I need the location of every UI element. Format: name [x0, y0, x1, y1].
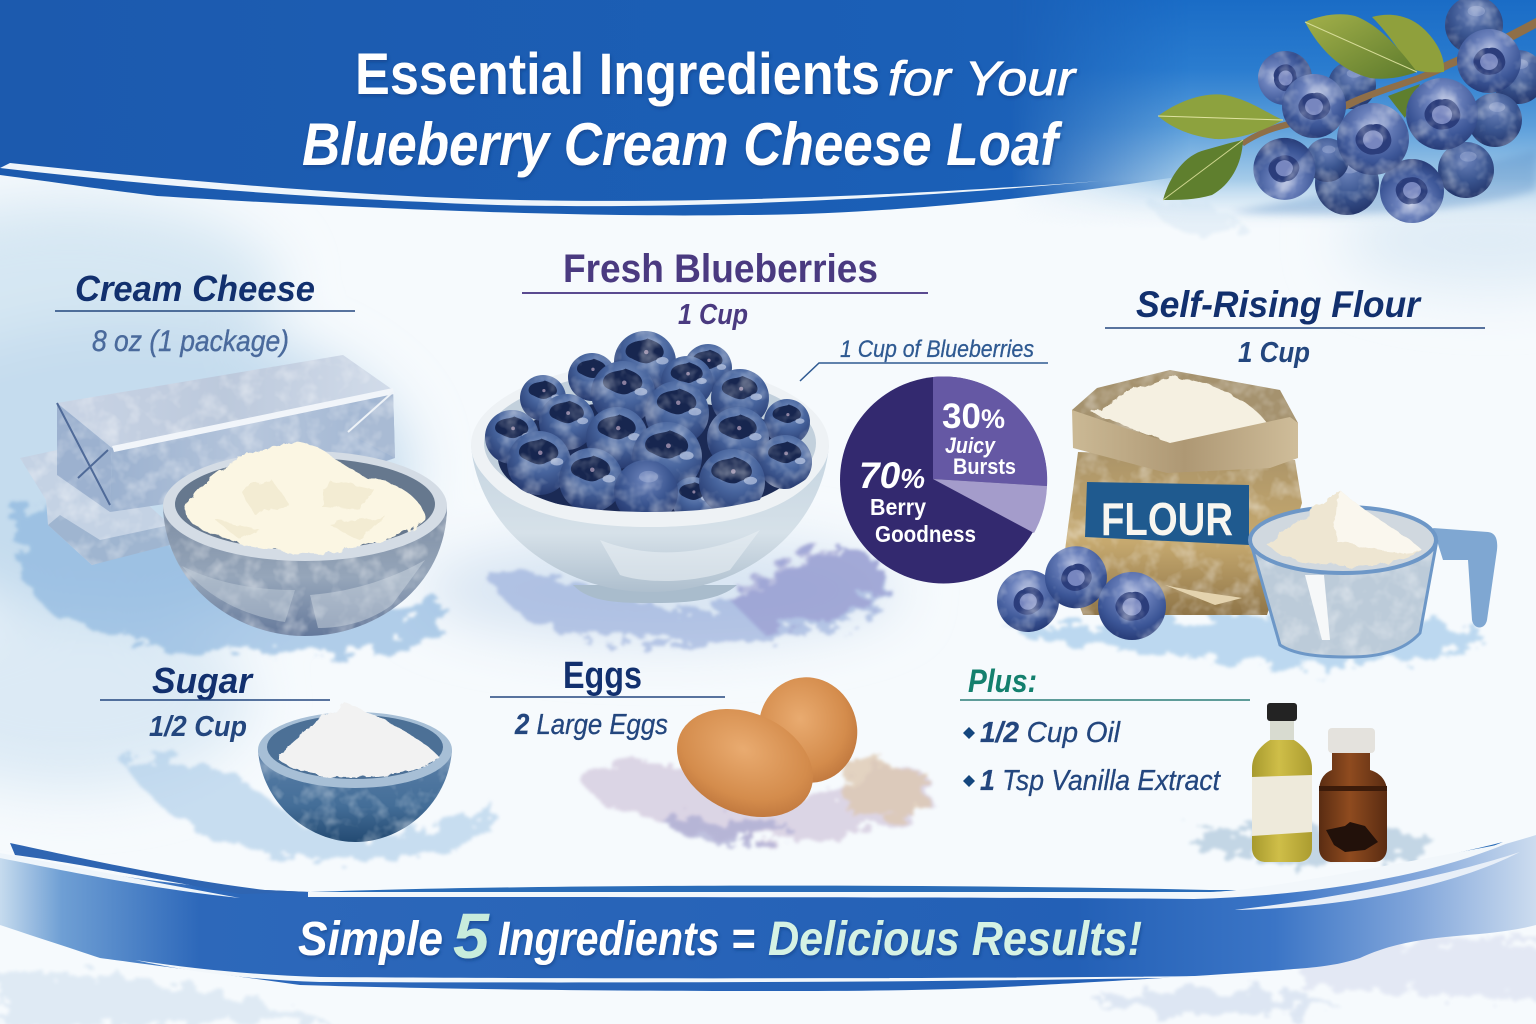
- footer tagline: [298, 900, 1142, 972]
- footer tagline: Delicious Results!: [768, 913, 1142, 966]
- text block: plus items: 1/2 Cup Oil: [980, 717, 1121, 749]
- heading: self-rising flour: [1105, 284, 1485, 369]
- pie chart: blueberry composition: Berry: [870, 494, 926, 520]
- heading: eggs: [490, 655, 725, 741]
- top banner: [0, 0, 1536, 230]
- heading: self-rising flour: 1 Cup: [1238, 337, 1310, 369]
- heading: fresh blueberries: Fresh Blueberries: [563, 247, 878, 291]
- illustration: flour sack, measuring cup, blueberries: [987, 370, 1497, 657]
- pie chart: blueberry composition: 30%: [942, 397, 1005, 436]
- text block: plus items: 1 Tsp Vanilla Extract: [980, 765, 1222, 797]
- pie chart: blueberry composition: Bursts: [953, 454, 1016, 479]
- heading: eggs: Eggs: [563, 655, 642, 697]
- heading: fresh blueberries: 1 Cup: [678, 299, 748, 331]
- illustration: blueberry branch with leaves: [1158, 0, 1536, 223]
- heading: sugar: [100, 660, 330, 743]
- text block: plus items: Plus:: [968, 663, 1037, 699]
- illustration: cream cheese package and bowl: [20, 355, 447, 636]
- title: Essential Ingredients: [355, 42, 880, 107]
- illustration: oil and vanilla bottles: [1252, 703, 1387, 862]
- heading: cream cheese: Cream Cheese: [75, 268, 315, 309]
- heading: cream cheese: [55, 268, 355, 358]
- footer tagline: Simple: [298, 913, 443, 966]
- title: Blueberry Cream Cheese Loaf: [302, 111, 1062, 178]
- heading: self-rising flour: Self-Rising Flour: [1136, 284, 1422, 325]
- title: [302, 42, 1077, 178]
- heading: sugar: 1/2 Cup: [149, 711, 247, 743]
- callout: 1 cup of blueberries: [800, 336, 1048, 381]
- callout: 1 cup of blueberries: 1 Cup of Blueberries: [840, 336, 1034, 363]
- illustration: bowl of sugar: [258, 703, 452, 842]
- heading: eggs: 2 Large Eggs: [514, 709, 668, 741]
- text block: plus items: [960, 663, 1250, 797]
- illustration: flour sack, measuring cup, blueberries: FLOUR: [1101, 493, 1233, 545]
- heading: sugar: Sugar: [152, 660, 254, 701]
- heading: cream cheese: 8 oz (1 package): [92, 325, 289, 358]
- pie chart: blueberry composition: Juicy: [945, 433, 997, 458]
- illustration: bowl of blueberries: [471, 331, 829, 603]
- heading: fresh blueberries: [522, 247, 928, 331]
- bottom banner: [0, 835, 1536, 991]
- pie chart: blueberry composition: Goodness: [875, 521, 976, 547]
- footer tagline: 5: [453, 900, 490, 972]
- title: for Your: [888, 53, 1077, 106]
- pie chart: blueberry composition: 70%: [859, 455, 925, 496]
- footer tagline: Ingredients =: [498, 913, 755, 966]
- pie chart: blueberry composition: [840, 376, 1047, 584]
- illustration: two eggs: [660, 666, 869, 838]
